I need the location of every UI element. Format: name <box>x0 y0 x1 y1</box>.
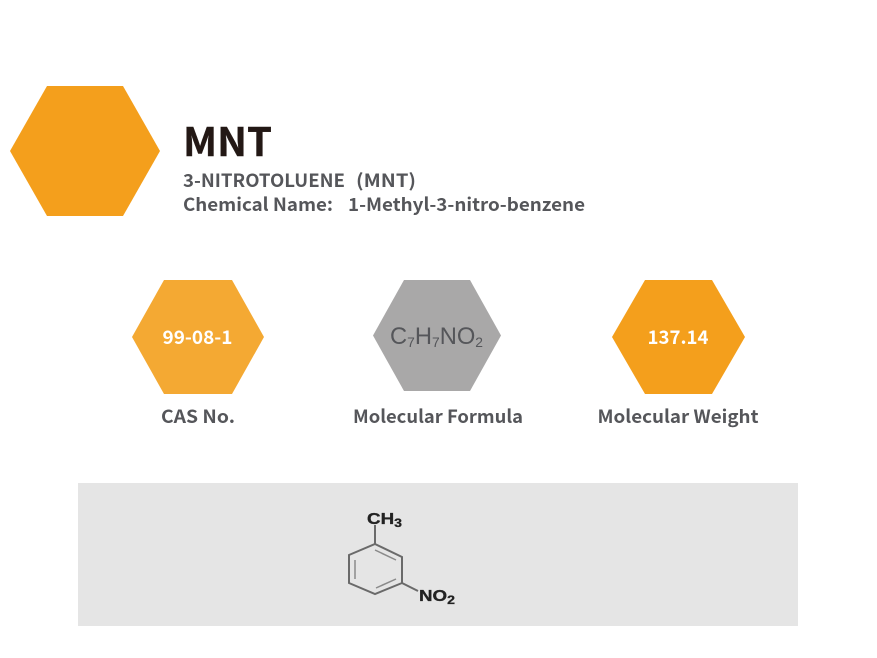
weight label: Molecular Weight <box>598 403 759 429</box>
CAS value: 99-08-1 <box>162 323 232 350</box>
formula value: NO <box>440 323 475 350</box>
nitro label: NO <box>419 588 443 605</box>
weight hexagon <box>612 280 745 394</box>
formula value: 7 <box>407 334 415 350</box>
stat: molecular weight <box>598 280 759 429</box>
formula label: Molecular Formula <box>353 403 523 429</box>
CAS hexagon <box>132 280 264 394</box>
methyl label: CH <box>367 511 390 528</box>
formula value: H <box>415 323 432 350</box>
formula value: 2 <box>475 334 483 350</box>
stat: CAS number <box>132 280 264 429</box>
subtitle <box>183 167 416 193</box>
formula value: 7 <box>432 334 440 350</box>
formula hexagon <box>373 280 501 391</box>
subtitle name: 3-NITROTOLUENE <box>183 167 345 193</box>
CAS label: CAS No. <box>161 403 235 429</box>
nitro label: 2 <box>447 593 455 607</box>
methyl label: 3 <box>394 516 402 530</box>
structure panel <box>78 483 798 626</box>
weight value: 137.14 <box>648 323 708 350</box>
chemical name value: 1-Methyl-3-nitro-benzene <box>348 191 585 217</box>
stat: molecular formula <box>353 280 523 429</box>
chemical name label: Chemical Name: <box>183 191 333 217</box>
chemical name <box>183 191 585 217</box>
benzene ring and bonds <box>349 525 418 594</box>
header hexagon <box>10 86 160 216</box>
structural formula <box>349 511 455 607</box>
title: MNT <box>183 112 272 168</box>
formula value: C <box>390 323 407 350</box>
subtitle abbreviation: (MNT) <box>356 167 416 193</box>
